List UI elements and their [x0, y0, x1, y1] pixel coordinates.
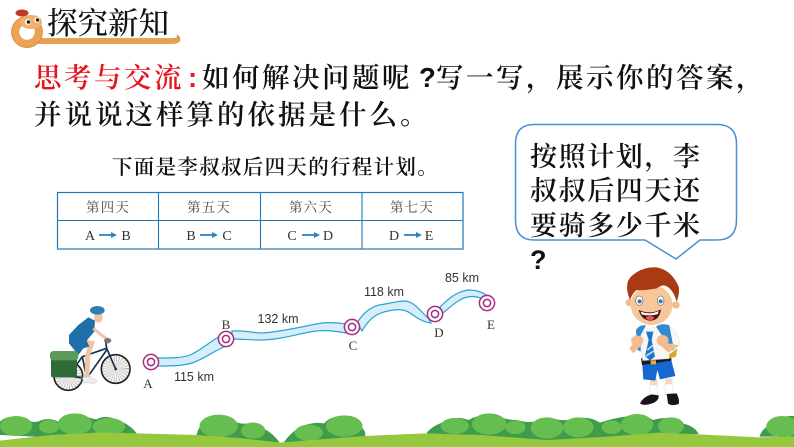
rider arm — [93, 328, 108, 339]
panniers — [51, 358, 77, 377]
schedule table: D — [389, 229, 399, 244]
hair — [627, 267, 679, 302]
head and helmet — [94, 312, 103, 323]
route stops — [143, 295, 495, 370]
rider torso and shorts — [69, 317, 95, 355]
schedule table: 第四天 — [86, 200, 130, 215]
icon: Q mascot ring with red bow — [12, 10, 180, 48]
schedule table: 第六天 — [289, 200, 333, 215]
question prompt text: 写一写， — [436, 62, 556, 93]
stop labels: C — [349, 338, 357, 353]
schedule table: D — [323, 229, 333, 244]
shorts — [642, 357, 675, 381]
bubble text: 要骑多少千米 — [530, 211, 702, 241]
schedule table: C — [222, 229, 232, 244]
question prompt text: 思考与交流 — [34, 62, 184, 93]
schedule table — [56, 192, 464, 250]
distance labels: 118 km — [364, 285, 404, 299]
ears and face — [626, 299, 633, 306]
route map — [142, 271, 496, 390]
section heading: 探究新知 — [11, 7, 180, 48]
bush highlights — [0, 413, 794, 441]
schedule table: 第五天 — [187, 200, 231, 215]
frame — [68, 342, 116, 378]
grass — [0, 432, 794, 447]
stop labels — [143, 317, 495, 391]
schedule table: C — [287, 229, 297, 244]
question prompt text: 展示你的答案， — [556, 62, 766, 93]
eyes — [636, 296, 643, 305]
bubble text — [530, 142, 702, 275]
stop labels: B — [222, 317, 231, 332]
bubble text: 叔叔后四天还 — [530, 176, 702, 206]
grass and bushes footer — [0, 413, 794, 447]
distance labels: 115 km — [174, 370, 214, 384]
question prompt text: 如何解决问题呢 — [202, 62, 412, 93]
bushes — [0, 414, 794, 443]
distance labels: 85 km — [445, 271, 479, 285]
schedule table: A — [85, 229, 96, 244]
schedule table: B — [186, 229, 196, 244]
mouth — [639, 309, 661, 321]
heading text: 探究新知 — [47, 7, 169, 41]
legs and shoes — [650, 378, 657, 395]
table title: 下面是李叔叔后四天的行程计划。 — [112, 157, 439, 179]
stop labels: D — [434, 325, 444, 340]
schedule table: 第七天 — [390, 200, 434, 215]
bubble text: 按照计划，李 — [530, 142, 702, 172]
tie — [645, 332, 655, 361]
wheels — [54, 362, 83, 390]
schedule table: B — [121, 229, 131, 244]
stop labels: E — [487, 317, 495, 332]
question prompt text: ? — [419, 62, 436, 93]
speech bubble — [514, 124, 738, 275]
rider leg — [80, 342, 92, 377]
cyclist with green panniers — [50, 306, 131, 392]
question prompt text: 并说说这样算的依据是什么。 — [34, 99, 430, 130]
distance labels — [174, 271, 479, 384]
distance labels: 132 km — [258, 312, 298, 326]
route ribbon — [158, 290, 486, 366]
question prompt text: : — [188, 62, 197, 93]
arms — [631, 336, 643, 346]
shirt and backpack — [631, 326, 679, 361]
boy character — [626, 267, 680, 406]
bubble text: ? — [530, 245, 548, 275]
question prompt text — [34, 62, 766, 130]
schedule table: E — [425, 229, 433, 244]
